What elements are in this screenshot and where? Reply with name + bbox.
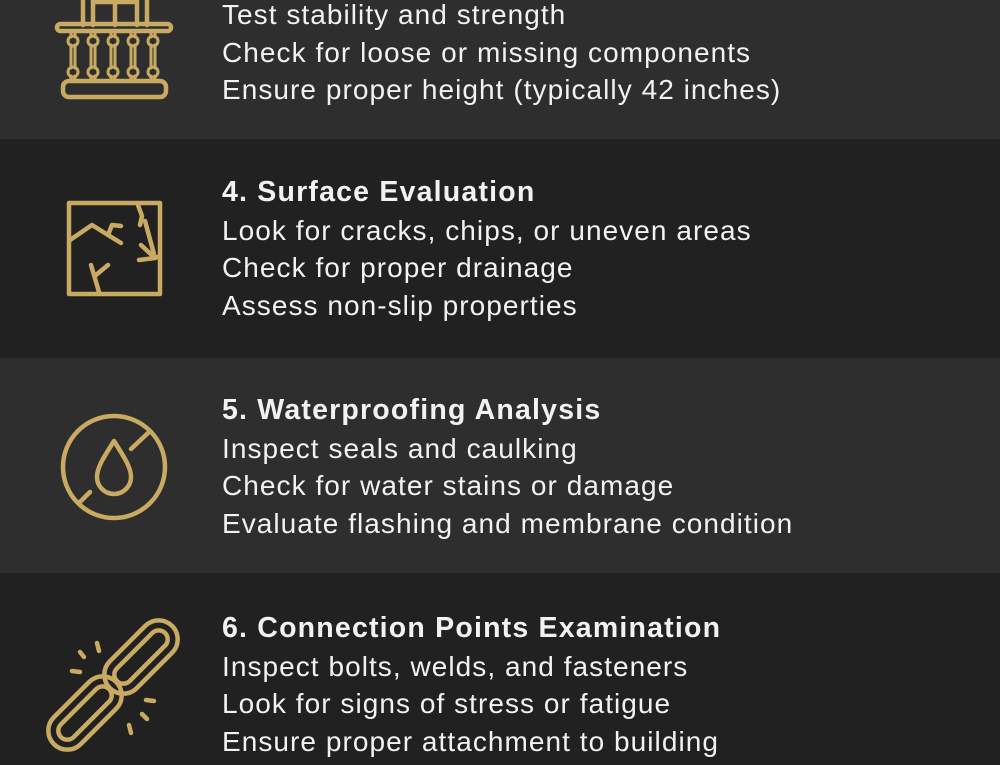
panel: band 4 surface: [0, 139, 1000, 358]
text: connection points: Inspect bolts, welds, and fasteners: [222, 650, 688, 682]
text: connection points: Ensure proper attachment to building: [222, 726, 719, 756]
text: waterproofing analysis: [222, 394, 793, 539]
text: surface evaluation: Assess non-slip properties: [222, 290, 578, 320]
text: connection points: 6. Connection Points Examination: [222, 612, 721, 644]
text: surface evaluation: [222, 176, 752, 321]
panel: band 3 railing: [0, 0, 1000, 139]
text: connection points: [222, 612, 721, 757]
text: waterproofing analysis: Evaluate flashing and membrane condition: [222, 508, 793, 538]
text: railing checks: [222, 0, 781, 105]
text: surface evaluation: Check for proper drainage: [222, 252, 574, 283]
text: surface evaluation: 4. Surface Evaluation: [222, 176, 535, 208]
text: railing checks: Ensure proper height (typically 42 inches): [222, 74, 781, 105]
panel: band 5 waterproofing: [0, 358, 1000, 573]
icon: balcony: [57, 0, 171, 97]
icon: cracked surface: [69, 203, 160, 294]
text: surface evaluation: Look for cracks, chips, or uneven areas: [222, 214, 752, 246]
panel: band 6 connection: [0, 573, 1000, 765]
text: railing checks: Check for loose or missing components: [222, 36, 751, 68]
text: waterproofing analysis: 5. Waterproofing Analysis: [222, 394, 601, 426]
text: waterproofing analysis: Check for water stains or damage: [222, 470, 674, 501]
text: connection points: Look for signs of stress or fatigue: [222, 688, 671, 719]
text: waterproofing analysis: Inspect seals and caulking: [222, 432, 578, 464]
icon: no water: [63, 416, 165, 518]
icon: broken chain: [40, 612, 186, 758]
